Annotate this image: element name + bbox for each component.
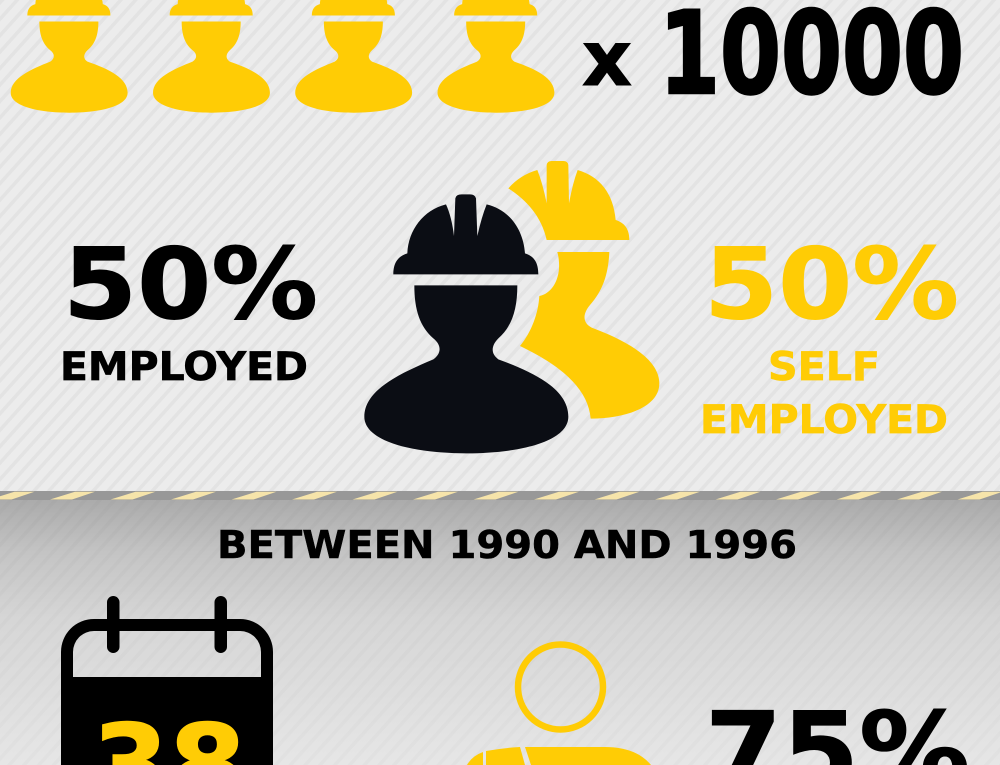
stat: 50% employed: EMPLOYED — [60, 345, 308, 390]
heading: between 1990 and 1996: BETWEEN 1990 AND 1996 — [217, 523, 797, 567]
stat: 50% self employed — [700, 228, 959, 443]
lower section background — [0, 500, 1000, 765]
dark worker in front — [364, 194, 568, 453]
row of four yellow workers — [11, 0, 554, 113]
stat: 50% self employed: 50% — [704, 228, 959, 342]
icon: employed and self-employed workers — [364, 161, 659, 453]
stat: 50% employed: 50% — [63, 228, 318, 342]
stat: 50% employed — [60, 228, 318, 390]
icon: person outline with yellow body — [467, 644, 651, 765]
stat: 50% self employed: EMPLOYED — [700, 398, 948, 443]
hazard stripe divider — [0, 491, 1000, 500]
stat: 50% self employed: SELF — [768, 345, 880, 390]
multiplier x 10000: x — [582, 14, 632, 103]
icon: calendar showing 38 — [61, 596, 273, 765]
yellow worker behind — [508, 161, 659, 419]
